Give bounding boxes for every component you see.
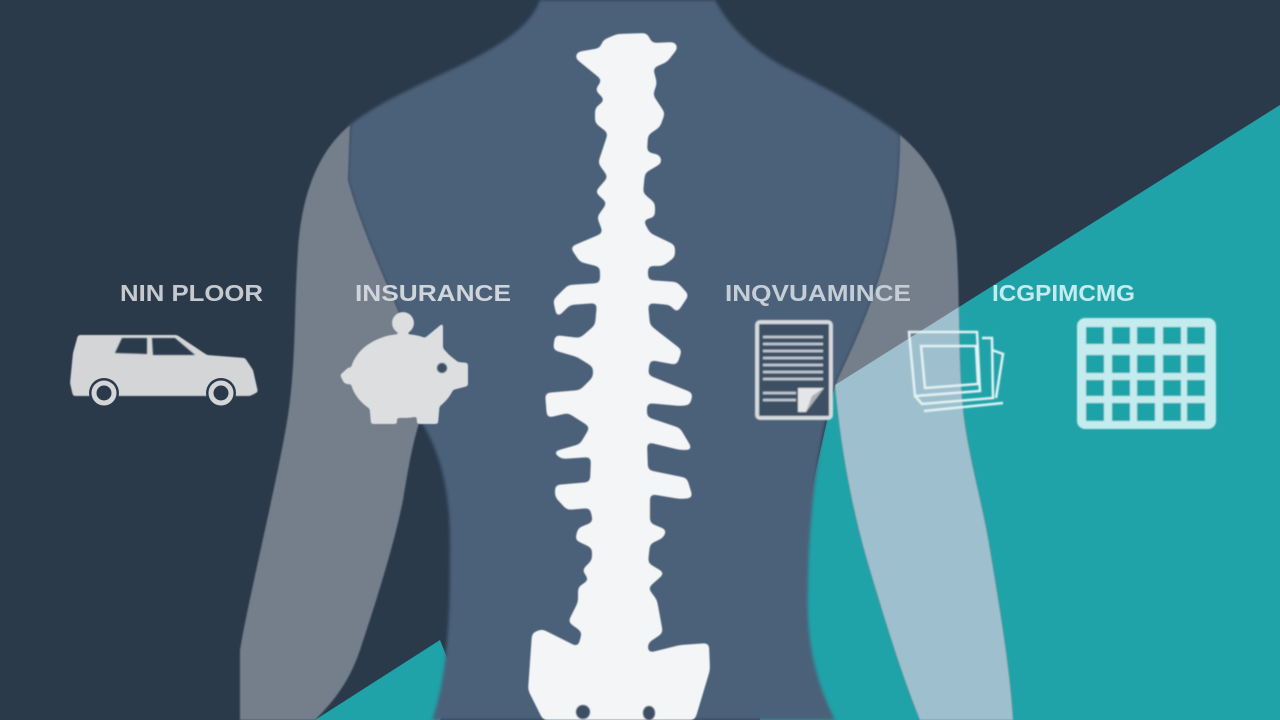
right arm bbox=[835, 135, 1013, 720]
teal diagonal panel right bbox=[760, 105, 1280, 720]
label: car column: NIN PLOOR bbox=[120, 280, 263, 306]
icon: document bbox=[757, 322, 831, 418]
icon: calendar bbox=[1077, 318, 1216, 429]
spine bbox=[528, 33, 710, 720]
teal corner bottom left bbox=[315, 640, 460, 720]
icon: car bbox=[70, 335, 258, 408]
label: teal column: ICGPIMCMG bbox=[992, 280, 1135, 306]
torso silhouette bbox=[348, 0, 900, 720]
icon: stack of bills bbox=[909, 332, 1003, 411]
icon: piggy bank bbox=[340, 312, 468, 424]
label: insurance: INSURANCE bbox=[355, 280, 511, 306]
label: insurance variant: INQVUAMINCE bbox=[725, 280, 911, 306]
left arm bbox=[240, 125, 422, 720]
right arm over teal bbox=[834, 306, 1014, 720]
